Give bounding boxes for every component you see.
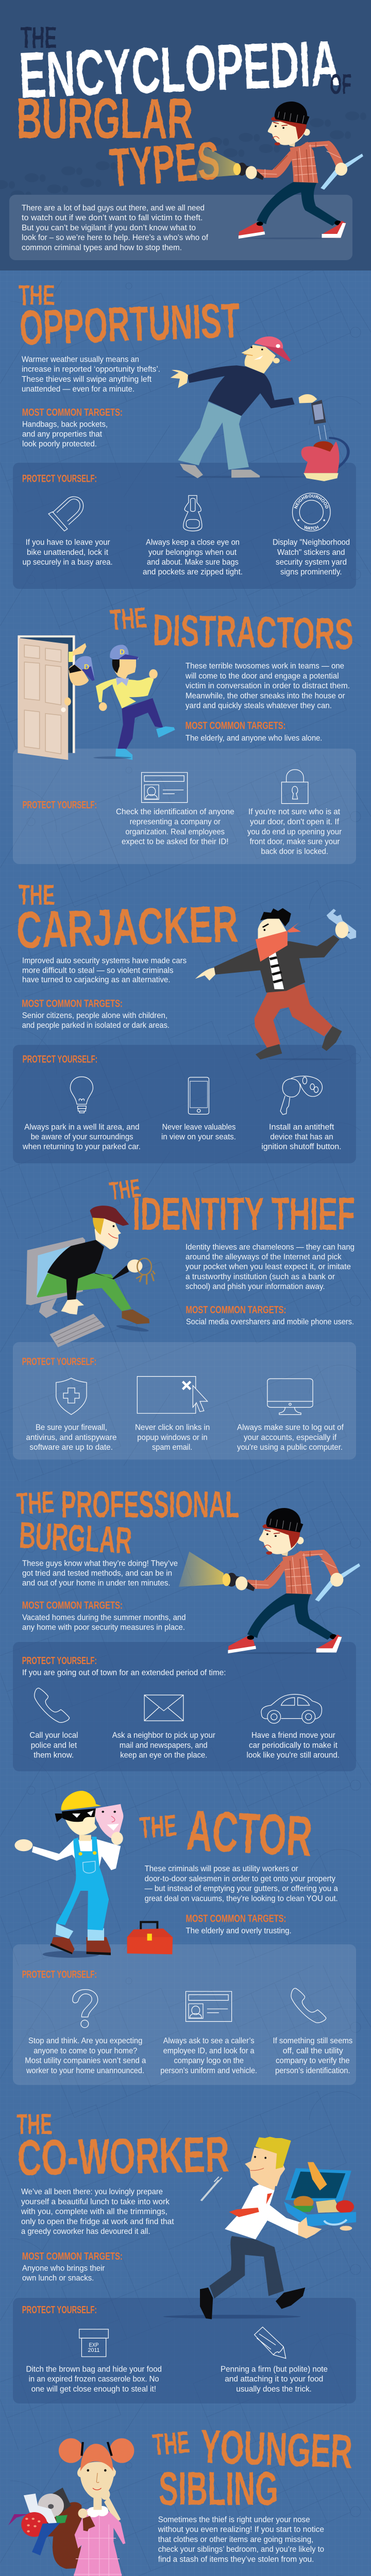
intro text: [22, 204, 209, 252]
description: unattended — even for a minute.: [22, 385, 134, 394]
tip text columns: Never leave valuables: [162, 1123, 235, 1132]
heading: the carjacker: [15, 878, 239, 959]
description: victim in conversation in order to distract them.: [185, 682, 350, 690]
heading: the professional burglar: BURGLAR: [18, 1515, 133, 1562]
tip text columns: [26, 1423, 344, 1452]
section: the co-worker: [13, 2108, 356, 2403]
footprint trail: header: [0, 111, 366, 199]
page background: dark header band: [0, 0, 371, 271]
tip text columns: If you have to leave your: [26, 538, 110, 547]
tip text columns: expect to be asked for their ID!: [122, 838, 229, 846]
character: actor with mask and toolbox: [14, 1791, 173, 1958]
panel: protect yourself: PROTECT YOURSELF:: [22, 1969, 97, 1980]
panel: protect yourself: [13, 1342, 356, 1460]
icon: neighbourhood watch seal: NEIGHBOURHOOD: [294, 495, 329, 509]
description: door-to-door salesmen in order to get onto your property: [145, 1874, 335, 1883]
heading: the professional burglar: [15, 1484, 239, 1562]
character: identity thief climbing out of monitor: [26, 1206, 155, 1347]
description: Improved auto security systems have made cars: [22, 956, 187, 965]
tip text columns: mail and newspapers, and: [120, 1741, 208, 1750]
heading: the opportunist: [19, 279, 241, 355]
tip text columns: device that has an: [270, 1133, 333, 1142]
tip text columns: representing a company or: [130, 818, 221, 826]
description: [22, 956, 187, 985]
icon: shield: [56, 1378, 87, 1415]
description: These guys know what they’re doing! They’ve: [22, 1559, 178, 1568]
icon: telephone: [291, 1988, 326, 2023]
title: [16, 21, 351, 198]
icon: neighbourhood watch seal: [292, 493, 331, 532]
tip text columns: Call your local: [29, 1731, 78, 1740]
targets: Vacated homes during the summer months, and: [22, 1613, 185, 1622]
tip text columns: Always keep a close eye on: [146, 538, 240, 547]
tip text columns: Never click on links in: [135, 1423, 210, 1432]
character: professional burglar: [223, 1508, 360, 1654]
description: Meanwhile, the other sneaks into the house or: [185, 691, 345, 700]
description: great deal on vacuums, they're looking to clean YOU out.: [145, 1894, 338, 1903]
description: around the alleyways of the Internet and pick: [185, 1252, 342, 1261]
description: These terrible twosomes work in teams — one: [185, 662, 344, 671]
tip text columns: company to verify the: [276, 2057, 350, 2065]
targets: look poorly protected.: [22, 440, 97, 449]
tip text columns: [23, 538, 350, 577]
character: carjacker with wrench: [195, 908, 356, 1060]
tip text columns: police and let: [31, 1741, 77, 1750]
description: [185, 662, 350, 710]
section: the younger sibling: [8, 2420, 356, 2576]
title: OF: [330, 68, 351, 100]
tip text columns: organization. Real employees: [125, 827, 225, 836]
tip text columns: worker to your home unannounced.: [26, 2066, 144, 2075]
panel: protect yourself: [13, 749, 356, 864]
targets: [185, 720, 322, 742]
targets: Social media oversharers and mobile phone users.: [186, 1318, 354, 1327]
icon: casserole box: 2011: [88, 2347, 100, 2353]
description: — but instead of emptying your gutters, or offering you a: [145, 1885, 338, 1893]
description: without you even realizing! If you start to notice: [158, 2526, 324, 2534]
tip text columns: Be sure your firewall,: [36, 1423, 107, 1432]
targets: [22, 1600, 185, 1632]
heading: the opportunist: OPPORTUNIST: [19, 293, 241, 355]
description: Warmer weather usually means an: [22, 355, 139, 364]
section: the professional burglar: [13, 1484, 360, 1771]
tip text columns: popup windows or in: [137, 1433, 208, 1442]
tip text columns: signs prominently.: [280, 568, 342, 577]
tip text columns: Stop and think. Are you expecting: [28, 2037, 142, 2045]
panel: protect yourself: [13, 463, 356, 589]
tip text columns: person’s uniform and vehicle.: [160, 2066, 257, 2075]
panel: protect yourself: If you are going out of town for an extended period of time:: [22, 1669, 226, 1677]
tip text columns: them know.: [33, 1751, 74, 1759]
tip text columns: your accounts, especially if: [244, 1433, 337, 1442]
intro text: to watch out if we don’t want to fall victim to theft.: [22, 214, 203, 223]
tip text columns: when returning to your parked car.: [22, 1143, 141, 1151]
icon: car: [261, 1694, 322, 1723]
panel: protect yourself: PROTECT YOURSELF:: [22, 2304, 97, 2316]
heading: the younger sibling: SIBLING: [159, 2463, 278, 2515]
description: more difficult to steal — so violent criminals: [22, 967, 174, 975]
heading: the opportunist: THE: [19, 279, 55, 311]
targets: and any properties that: [22, 430, 103, 439]
tip text columns: Watch" stickers and: [277, 548, 345, 557]
description: [158, 2515, 324, 2564]
targets: Handbags, back pockets,: [22, 420, 108, 429]
targets: MOST COMMON TARGETS:: [185, 720, 286, 732]
heading: the co-worker: CO-WORKER: [17, 2126, 230, 2186]
tip text columns: Ditch the brown bag and hide your food: [26, 2365, 162, 2374]
description: only to open the fridge at work and find that: [21, 2217, 174, 2226]
description: your pocket when you least expect it, or imitate: [185, 1263, 351, 1272]
tip text columns: [116, 808, 342, 856]
targets: MOST COMMON TARGETS:: [22, 2251, 123, 2262]
icon: neighbourhood watch seal: ★: [297, 518, 300, 522]
tip text columns: If something still seems: [273, 2037, 352, 2045]
flashlight beam: professional burglar: [179, 1552, 224, 1587]
tip text columns: usually does the trick.: [236, 2385, 312, 2394]
panel: protect yourself: [13, 1642, 356, 1771]
tip text columns: and about. Make sure bags: [147, 558, 239, 567]
tip text columns: Display "Neighborhood: [273, 538, 350, 547]
tip text columns: Check the identification of anyone: [116, 808, 234, 817]
description: and out of your home in under ten minutes.: [22, 1579, 171, 1588]
description: have turned to carjacking as an alternative.: [22, 976, 171, 985]
icon: casserole box: [79, 2329, 108, 2357]
targets: [22, 407, 123, 449]
icon: car keys: [280, 1076, 322, 1114]
tip text columns: you're using a public computer.: [237, 1443, 343, 1452]
tip text columns: Install an antitheft: [269, 1123, 334, 1132]
intro text: There are a lot of bad guys out there, and we all need: [22, 204, 205, 212]
tip text columns: you do end up opening your: [247, 827, 342, 836]
tip text columns: one will get close enough to steal it!: [31, 2385, 156, 2394]
heading: the younger sibling: THE: [151, 2426, 191, 2462]
character: co-worker head: [245, 2137, 291, 2186]
cap letters: [84, 648, 125, 671]
targets: Anyone who brings their: [22, 2264, 105, 2273]
heading: the professional burglar: PROFESSIONAL: [61, 1484, 239, 1526]
icon: casserole box: EXP: [89, 2342, 99, 2348]
description: yard and quickly steals whatever they can.: [185, 701, 332, 710]
tip text columns: keep an eye on the place.: [120, 1751, 207, 1759]
icon: smartphone: [189, 1077, 209, 1114]
targets: Senior citizens, people alone with children,: [22, 1011, 167, 1020]
description: increase in reported ‘opportunity thefts’.: [22, 365, 160, 374]
tip text columns: look like you're still around.: [246, 1751, 340, 1759]
icon: computer monitor: [267, 1379, 313, 1415]
icon: question mark: [73, 1990, 98, 2028]
description: yourself a beautiful lunch to take into work: [21, 2197, 170, 2206]
intro text: look for – so we’re here to help. Here’s a who’s who of: [22, 233, 209, 242]
description: school) and phish your information away.: [185, 1282, 325, 1291]
title: TYPES: [108, 130, 222, 198]
targets: and people parked in isolated or dark areas.: [22, 1021, 170, 1030]
heading: the identity thief: THE: [108, 1173, 142, 1206]
character: younger sibling with sack: [8, 2438, 134, 2576]
targets: [22, 998, 170, 1030]
section: the actor: [13, 1791, 356, 2085]
targets: [22, 2251, 123, 2283]
panel: protect yourself: PROTECT YOURSELF:: [22, 1356, 96, 1367]
tip text columns: bike unattended, lock it: [27, 548, 109, 557]
icon: bike lock: [48, 497, 83, 531]
panel: protect yourself: PROTECT YOURSELF:: [23, 800, 97, 811]
icon: padlock: [281, 770, 308, 804]
heading: the co-worker: [16, 2108, 230, 2186]
tip text columns: company logo on the: [174, 2057, 244, 2065]
tip text columns: your belongings when out: [148, 548, 237, 557]
tip text columns: Always ask to see a caller’s: [163, 2037, 255, 2045]
tip text columns: spam email.: [152, 1443, 192, 1452]
targets: MOST COMMON TARGETS:: [22, 407, 123, 418]
tip text columns: Always make sure to log out of: [237, 1423, 344, 1432]
tip text columns: If you're not sure who is at: [248, 808, 341, 817]
tip text columns: employee ID, and look for a: [163, 2046, 255, 2055]
tip text columns: Most utility companies won’t send a: [25, 2057, 146, 2065]
description: got tried and tested methods, and can be in: [22, 1569, 172, 1578]
description: These criminals will pose as utility workers or: [145, 1865, 298, 1873]
heading: the co-worker: THE: [16, 2108, 52, 2140]
heading: the actor: THE: [138, 1809, 178, 1845]
description: a greedy coworker has devoured it all.: [21, 2227, 150, 2236]
panel: protect yourself: PROTECT YOURSELF:: [23, 1054, 97, 1065]
intro panel: [9, 195, 352, 260]
tip text columns: [29, 1731, 340, 1759]
heading: the carjacker: THE: [19, 878, 55, 911]
heading: the younger sibling: [151, 2420, 353, 2515]
panel: protect yourself: PROTECT YOURSELF:: [22, 473, 97, 484]
section: the opportunist: [13, 279, 356, 589]
heading: the carjacker: CARJACKER: [15, 895, 239, 959]
tip text columns: your door, don't open it. If: [250, 818, 340, 826]
tip text columns: up securely in a busy area.: [23, 558, 113, 567]
icon: telephone: [35, 1688, 70, 1722]
targets: MOST COMMON TARGETS:: [22, 998, 123, 1010]
description: with you, complete with all the trimmings,: [21, 2208, 167, 2216]
description: Identity thieves are chameleons — they can hang: [185, 1243, 355, 1251]
tip text columns: ignition shutoff button.: [261, 1143, 342, 1151]
icon: id card: [186, 1991, 232, 2022]
tip text columns: Always park in a well lit area, and: [24, 1123, 139, 1132]
description: We’ve all been there: you lovingly prepare: [21, 2188, 163, 2196]
tip text columns: be aware of your surroundings: [31, 1133, 133, 1142]
panel: protect yourself: PROTECT YOURSELF:: [22, 1655, 97, 1667]
heading: the identity thief: [108, 1173, 355, 1240]
tip text columns: in an expired frozen casserole box. No: [29, 2375, 159, 2384]
targets: The elderly, and anyone who lives alone.: [185, 734, 322, 742]
section: the identity thief: [13, 1173, 356, 1460]
description: [21, 2188, 174, 2236]
section: the distractors: [13, 601, 356, 864]
description: Sometimes the thief is right under your nose: [158, 2515, 310, 2524]
intro text: But you can’t be vigilant if you don’t know what to: [22, 224, 196, 232]
illustration: door and two distractors: [18, 635, 175, 760]
targets: own lunch or snacks.: [22, 2274, 94, 2283]
description: a trustworthy institution (such as a bank or: [185, 1273, 335, 1281]
icon: pencil: [255, 2327, 286, 2359]
targets: MOST COMMON TARGETS:: [22, 1600, 123, 1612]
intro text: common criminal types and how to stop them.: [22, 244, 182, 252]
tip text columns: and attaching it to your food: [225, 2375, 323, 2384]
targets: The elderly and overly trusting.: [185, 1926, 292, 1935]
icon: id card: [142, 772, 188, 803]
tip text columns: security system yard: [276, 558, 347, 567]
tip text columns: [25, 2037, 352, 2075]
heading: the actor: [138, 1799, 314, 1869]
targets: [185, 1304, 354, 1327]
icon: neighbourhood watch seal: ★: [323, 518, 326, 522]
tip text columns: front door, make sure your: [249, 838, 340, 846]
cap letters: D: [120, 648, 125, 656]
icon: neighbourhood watch seal: WATCH: [304, 526, 318, 530]
character: opportunist with phone and backpack: [171, 336, 348, 481]
description: [22, 355, 160, 394]
targets: MOST COMMON TARGETS:: [185, 1304, 286, 1316]
icon: envelope: [144, 1695, 183, 1721]
description: check your siblings’ bedroom, and you’re likely to: [158, 2545, 324, 2554]
cap letters: D: [84, 663, 89, 671]
tip text columns: off, call the utility: [283, 2046, 343, 2055]
title: BURGLAR: [16, 87, 193, 150]
flashlight beam: header: [194, 146, 237, 179]
burglar character: header: [233, 101, 363, 239]
description: will come to the door and engage a potential: [185, 672, 339, 681]
tip text columns: in view on your seats.: [161, 1133, 236, 1142]
tip text columns: and pockets are zipped tight.: [143, 568, 243, 577]
heading: the professional burglar: THE: [15, 1485, 55, 1521]
targets: any home with poor security measures in place.: [22, 1623, 185, 1632]
tip text columns: Have a friend move your: [251, 1731, 335, 1740]
tip text columns: antivirus, and antispyware: [26, 1433, 116, 1442]
targets: [185, 1913, 292, 1935]
description: These thieves will swipe anything left: [22, 375, 152, 384]
tip text columns: [26, 2365, 328, 2394]
targets: MOST COMMON TARGETS:: [185, 1913, 286, 1925]
icon: zipper pull: [183, 496, 202, 531]
panel: protect yourself: [13, 2298, 356, 2403]
panel: protect yourself: [13, 1944, 356, 2085]
description: [185, 1243, 355, 1291]
tip text columns: person’s identification.: [275, 2066, 350, 2075]
description: [145, 1865, 338, 1903]
tip text columns: back door is locked.: [261, 848, 328, 856]
tip text columns: software are up to date.: [29, 1443, 113, 1452]
icon: popup window and cursor: [137, 1377, 208, 1413]
tip text columns: car periodically to make it: [249, 1741, 338, 1750]
description: [22, 1559, 178, 1588]
tip text columns: Ask a neighbor to pick up your: [112, 1731, 216, 1740]
title: THE: [21, 21, 57, 55]
character: co-worker with lunchbox: [163, 2162, 356, 2319]
description: find a stash of items they’ve stolen from you.: [158, 2555, 314, 2564]
heading: the distractors: [109, 601, 354, 659]
description: that clothes or other items are going missing,: [158, 2535, 313, 2544]
tip text columns: anyone to come to your home?: [33, 2046, 137, 2055]
icon: light bulb: [70, 1077, 93, 1113]
tip text columns: [22, 1123, 342, 1151]
section: the carjacker: [13, 878, 356, 1163]
panel: protect yourself: [13, 1045, 356, 1163]
tip text columns: Penning a firm (but polite) note: [221, 2365, 328, 2374]
heading: the distractors: THE: [109, 601, 148, 636]
